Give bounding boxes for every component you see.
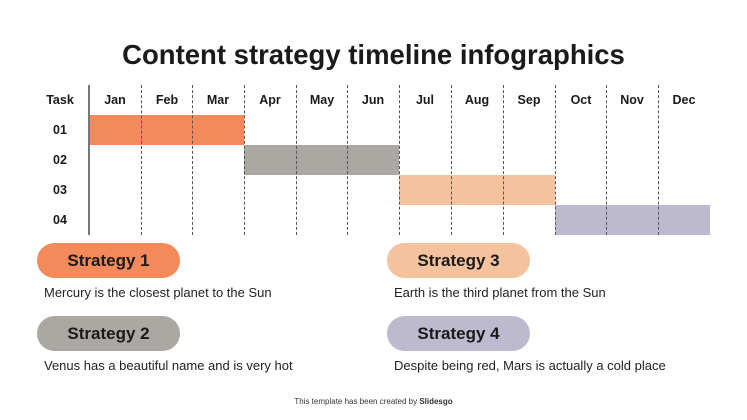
gantt chart: Apr	[259, 93, 281, 107]
gantt chart: 01	[53, 123, 67, 137]
pill: strategy 3: Strategy 3	[417, 251, 500, 270]
bar: task 04	[555, 205, 710, 235]
pill: strategy 4	[387, 316, 530, 351]
pill: strategy 4: Strategy 4	[417, 324, 500, 343]
gantt chart: Mar	[207, 93, 229, 107]
gantt chart: Task	[46, 93, 74, 107]
pill: strategy 2: Strategy 2	[67, 324, 150, 343]
gantt chart: Nov	[620, 93, 644, 107]
text: strategy 2: Venus has a beautiful name and is very hot	[44, 358, 293, 373]
gantt chart: Dec	[673, 93, 695, 107]
title: Content strategy timeline infographics	[122, 39, 625, 70]
pill: strategy 2	[37, 316, 180, 351]
gantt chart: 03	[53, 183, 67, 197]
pill: strategy 1	[37, 243, 180, 278]
gantt chart: Jun	[362, 93, 384, 107]
pill: strategy 1: Strategy 1	[67, 251, 150, 270]
gantt chart: Sep	[518, 93, 540, 107]
bar: task 03	[399, 175, 555, 205]
text: strategy 4: Despite being red, Mars is actually a cold place	[394, 358, 666, 373]
gantt chart: 04	[53, 213, 67, 227]
gantt chart: Jul	[416, 93, 434, 107]
gantt chart: Oct	[571, 93, 591, 107]
text: strategy 1: Mercury is the closest planet to the Sun	[44, 285, 272, 300]
bar: task 01	[89, 115, 244, 145]
gantt chart: Aug	[465, 93, 489, 107]
text: strategy 3: Earth is the third planet from the Sun	[394, 285, 606, 300]
gantt chart	[46, 85, 710, 235]
gantt chart: Feb	[156, 93, 178, 107]
gantt chart: May	[310, 93, 334, 107]
bar: task 02	[244, 145, 399, 175]
gantt chart: Jan	[104, 93, 126, 107]
footer credit: This template has been created by Slidesgo	[294, 397, 453, 406]
gantt chart: 02	[53, 153, 67, 167]
pill: strategy 3	[387, 243, 530, 278]
